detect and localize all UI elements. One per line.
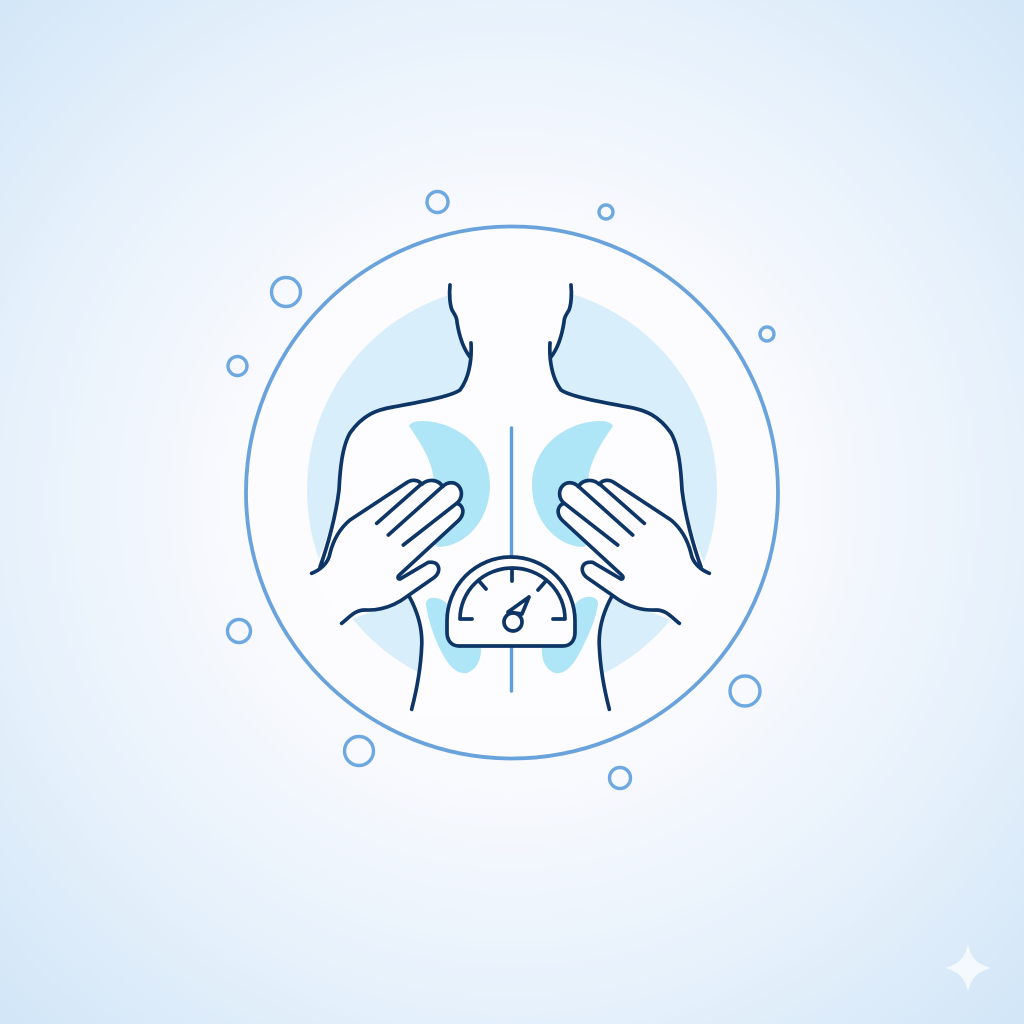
left neck and shoulder — [320, 285, 471, 567]
floating bubbles — [228, 192, 774, 788]
left hand — [312, 480, 463, 709]
body outline — [320, 285, 701, 567]
right hand — [558, 480, 709, 709]
gauge needle — [508, 597, 529, 614]
gauge body — [447, 557, 575, 646]
body silhouette fill — [312, 280, 709, 715]
gauge icon — [447, 557, 575, 646]
spine line — [510, 428, 513, 691]
main circle — [246, 226, 778, 758]
pale blue backdrop disc — [307, 285, 717, 695]
highlighted muscle areas — [409, 421, 613, 673]
gauge hub — [504, 613, 522, 631]
sparkle watermark — [945, 944, 991, 992]
gauge dial arc and ticks — [460, 568, 565, 619]
right neck and shoulder — [550, 285, 701, 567]
